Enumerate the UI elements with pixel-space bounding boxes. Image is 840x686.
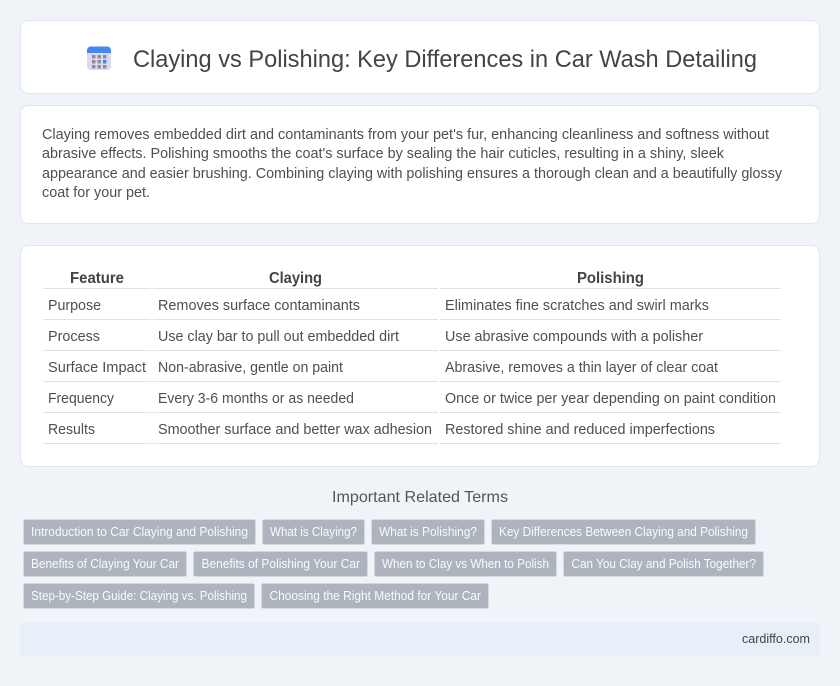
table row: frequency: Once or twice per year depending on paint condition [445, 391, 776, 407]
tag [262, 520, 364, 544]
tag: What is Claying? [270, 525, 357, 539]
table row: process: Use clay bar to pull out embedded dirt [158, 329, 399, 345]
table row: frequency: Every 3-6 months or as needed [158, 391, 354, 407]
tag: Can You Clay and Polish Together? [572, 557, 756, 571]
tag: Benefits of Claying Your Car [31, 557, 179, 571]
tag [24, 552, 186, 576]
footer source text: cardiffo.com [742, 632, 810, 646]
tag: When to Clay vs When to Polish [382, 557, 549, 571]
table header row: Feature [70, 270, 124, 287]
tag [24, 584, 254, 608]
header panel [20, 20, 820, 94]
tag [24, 520, 256, 544]
text block: summary paragraph: Claying removes embedded dirt and contaminants from your pet's fur, enhancing cleanliness and softness without [42, 127, 769, 143]
panel: summary [20, 106, 820, 224]
tag [262, 584, 488, 608]
table row: process [48, 329, 703, 345]
related term tags [24, 520, 764, 608]
icon: calendar [87, 46, 111, 70]
tag: Benefits of Polishing Your Car [202, 557, 360, 571]
text block: summary paragraph: coat for your pet. [42, 185, 150, 201]
table header row: Polishing [577, 270, 644, 287]
tag [372, 520, 484, 544]
tag [194, 552, 368, 576]
footer [20, 622, 820, 656]
panel: comparison table [20, 246, 820, 466]
table row: frequency: Frequency [48, 391, 115, 407]
tag [374, 552, 556, 576]
table row: process: Process [48, 329, 100, 345]
tag [492, 520, 756, 544]
tag: Introduction to Car Claying and Polishing [31, 525, 248, 539]
table row: surface impact: Surface Impact [48, 360, 146, 376]
tag: What is Polishing? [379, 525, 477, 539]
tag: Choosing the Right Method for Your Car [270, 589, 481, 603]
tag [564, 552, 764, 576]
table row: results: Restored shine and reduced imperfections [445, 422, 715, 438]
table row: purpose: Removes surface contaminants [158, 298, 360, 314]
table row: surface impact: Abrasive, removes a thin layer of clear coat [445, 360, 718, 376]
table header row: Claying [269, 270, 322, 287]
table header row [70, 270, 644, 287]
text block: summary paragraph: abrasive effects. Polishing smooths the coat's surface by sealing the hair cuticles, resulting in a shiny, sleek [42, 146, 725, 162]
text block: summary paragraph: appearance and easier brushing. Combining claying with polishing ensures a thorough clean and a beautifully glossy [42, 166, 783, 182]
tag: Step-by-Step Guide: Claying vs. Polishing [31, 589, 247, 603]
table row: results [48, 422, 715, 438]
title: Claying vs Polishing: Key Differences in Car Wash Detailing [133, 46, 757, 73]
table row: purpose: Purpose [48, 298, 101, 314]
tag: Key Differences Between Claying and Polishing [499, 525, 748, 539]
table row: surface impact [48, 360, 718, 376]
table row: purpose: Eliminates fine scratches and swirl marks [445, 298, 709, 314]
text block: summary paragraph [42, 127, 783, 201]
table row: process: Use abrasive compounds with a polisher [445, 329, 703, 345]
table row: results: Results [48, 422, 95, 438]
table row: purpose [48, 298, 709, 314]
table row: frequency [48, 391, 776, 407]
heading: important related terms: Important Related Terms [332, 489, 508, 506]
table row: results: Smoother surface and better wax adhesion [158, 422, 432, 438]
table row: surface impact: Non-abrasive, gentle on paint [158, 360, 343, 376]
